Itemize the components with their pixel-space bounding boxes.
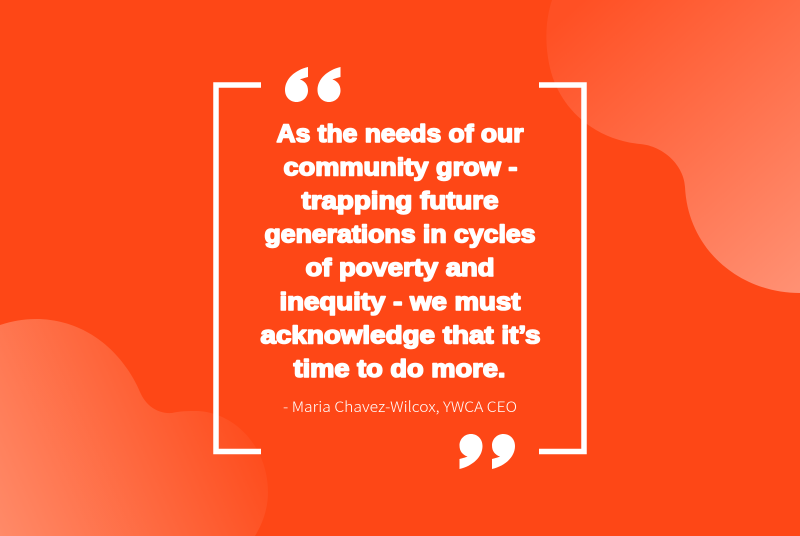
quote text: generations in cycles bbox=[264, 220, 536, 248]
quote text: inequity - we must bbox=[280, 288, 521, 316]
quote text bbox=[260, 120, 540, 383]
right bracket bbox=[539, 85, 584, 452]
quote text: trapping future bbox=[302, 187, 499, 215]
attribution: - Maria Chavez-Wilcox, YWCA CEO bbox=[283, 396, 517, 417]
quote text: of poverty and bbox=[306, 254, 494, 282]
quote text: acknowledge that it’s bbox=[260, 322, 540, 350]
blob: top right bbox=[546, 0, 800, 293]
quote text: time to do more. bbox=[294, 355, 506, 383]
quote text: community grow - bbox=[284, 154, 518, 182]
blob: bottom left bbox=[0, 319, 268, 536]
icon: closing quotation mark bbox=[460, 434, 515, 469]
left bracket bbox=[216, 85, 261, 452]
icon: opening quotation mark bbox=[285, 67, 340, 102]
quote text: As the needs of our bbox=[276, 120, 524, 148]
